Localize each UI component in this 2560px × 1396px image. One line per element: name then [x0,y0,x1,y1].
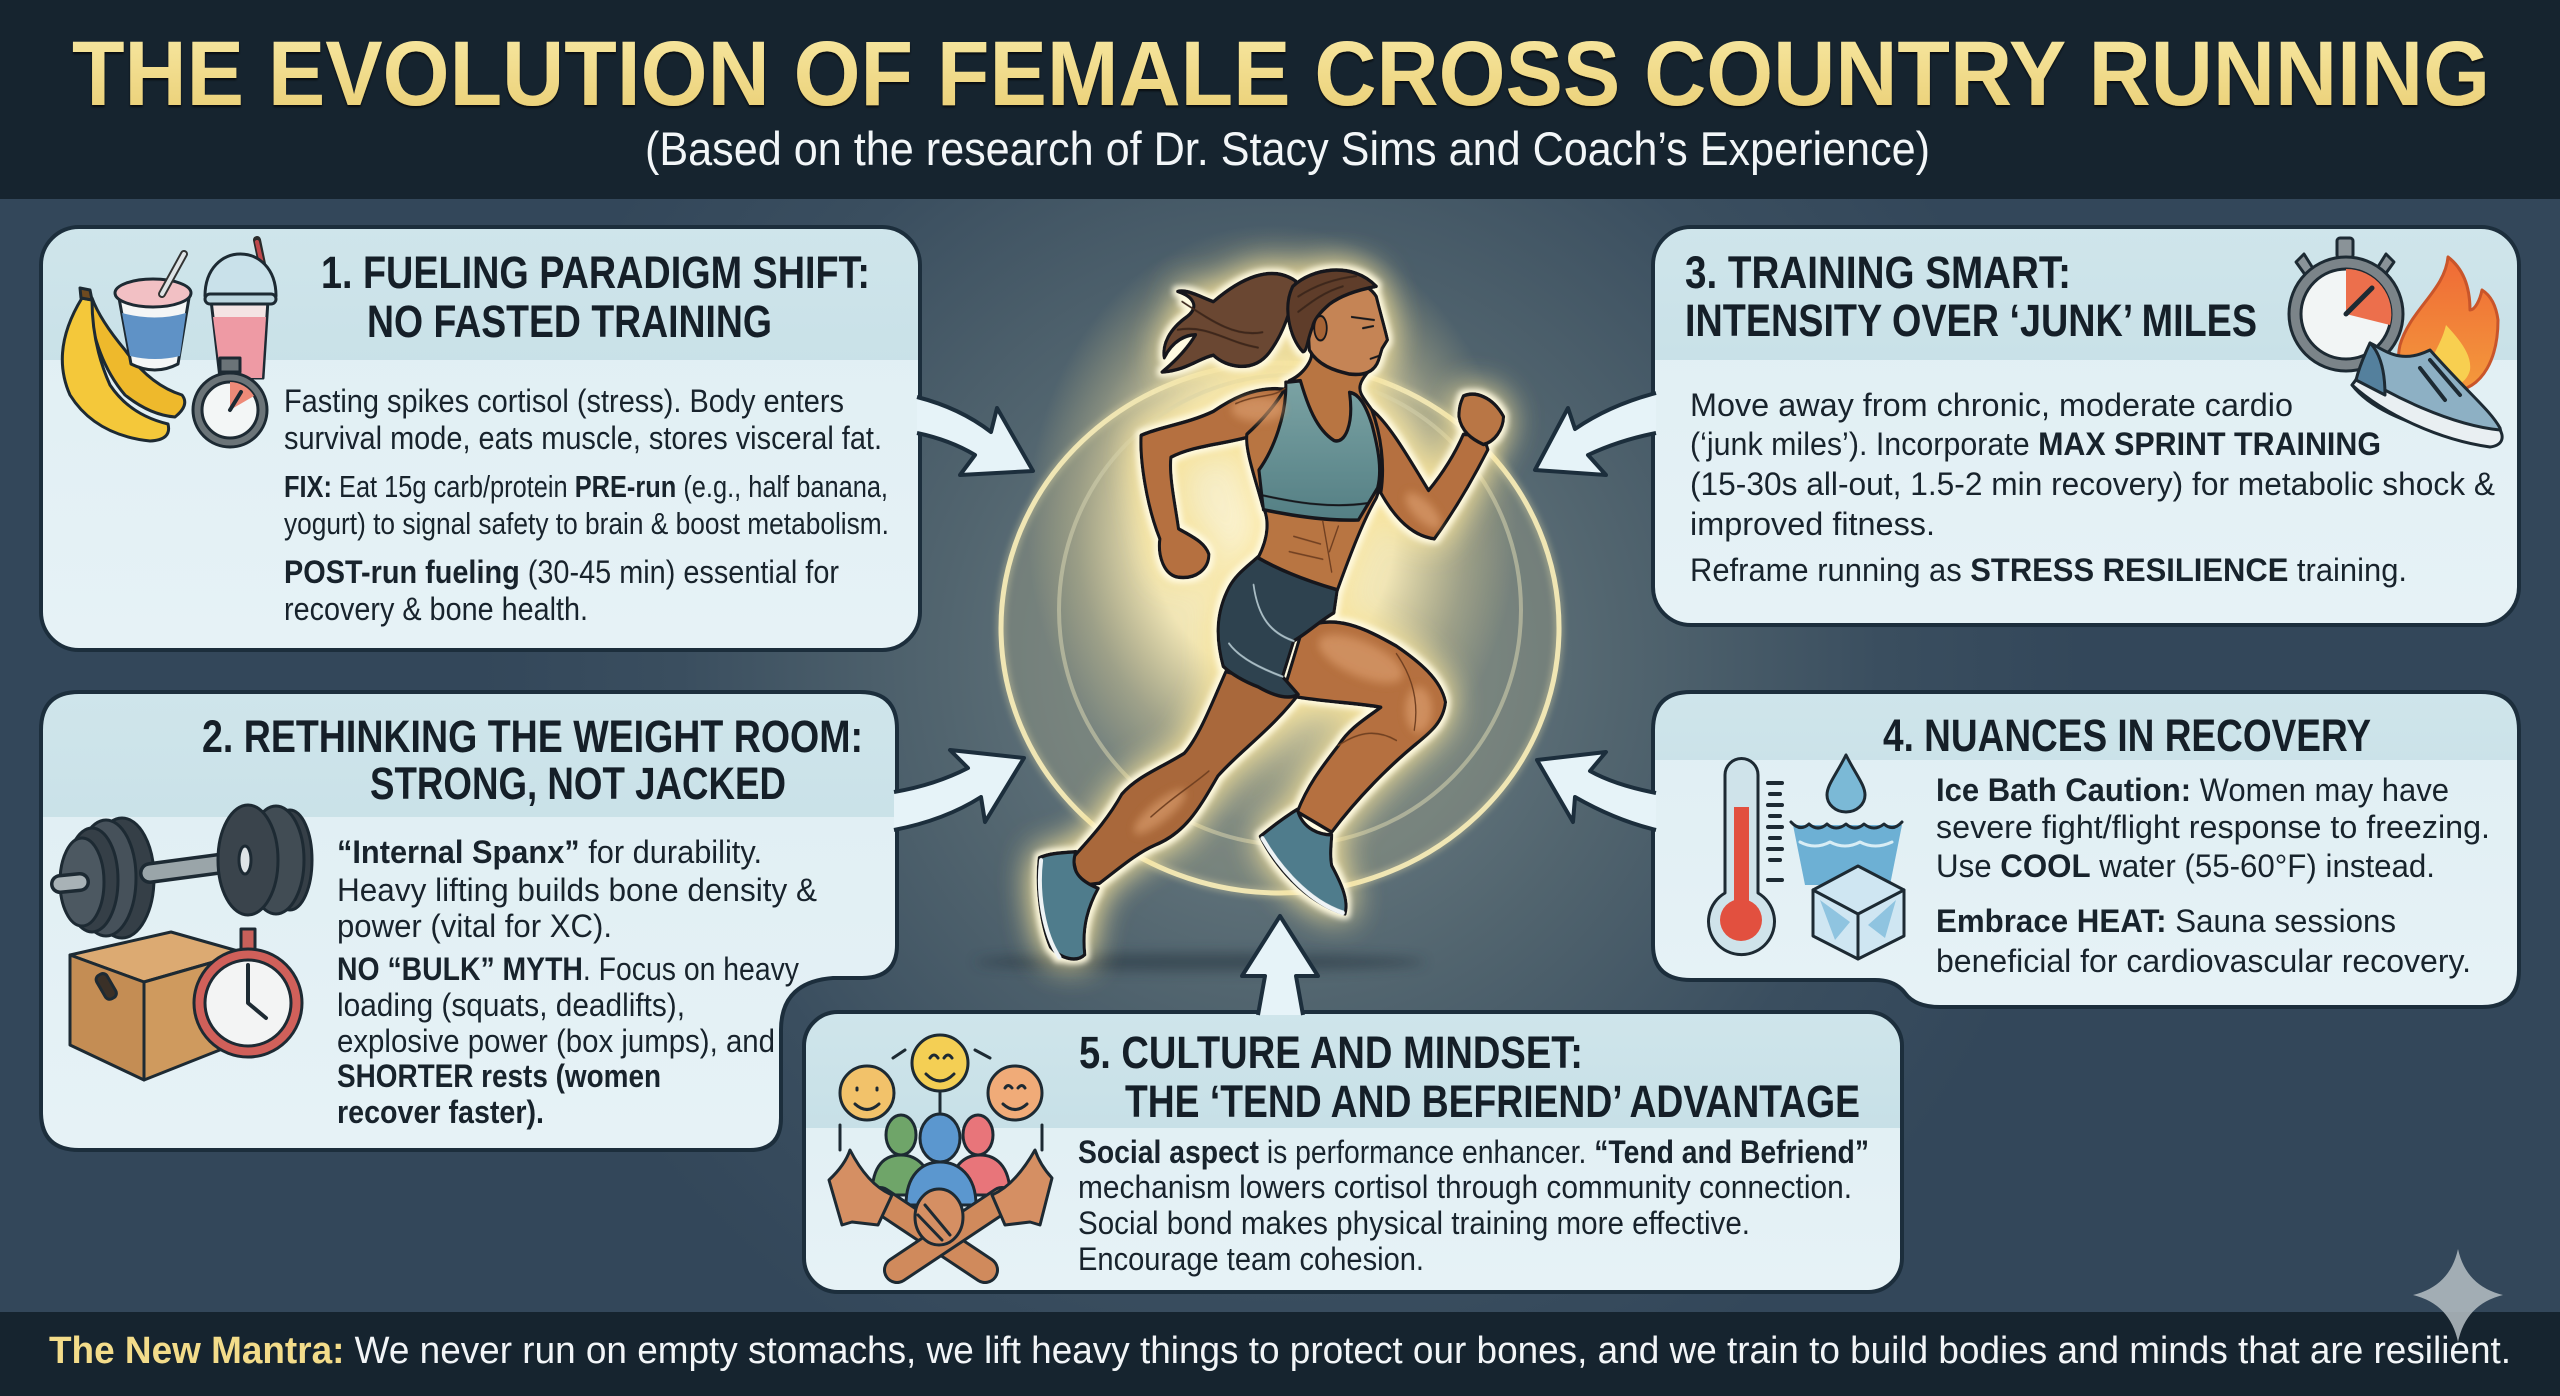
body text: Heavy lifting builds bone density & [337,872,817,908]
body text: yogurt) to signal safety to brain & boost metabolism. [284,506,889,541]
panel 5: culture and mindset [804,1012,1902,1292]
panel 3: training smart [1653,227,2519,625]
body text: loading (squats, deadlifts), [337,987,685,1023]
body text: POST-run fueling (30-45 min) essential for [284,554,839,590]
body text: recovery & bone health. [284,591,588,627]
body text: Social aspect is performance enhancer. “Tend and Befriend” [1078,1134,1869,1170]
body text: Encourage team cohesion. [1078,1241,1424,1277]
body text: severe fight/flight response to freezing. [1936,809,2490,845]
body text: power (vital for XC). [337,908,612,944]
mantra text: The New Mantra: We never run on empty stomachs, we lift heavy things to protect our bones, and we train to build bodies and minds that are resilient. [49,1330,2511,1372]
icon: food and stopwatch [62,240,276,447]
body text: (‘junk miles’). Incorporate MAX SPRINT TRAINING [1690,426,2381,462]
back leg [1073,672,1300,886]
icon: stopwatch, flame and shoe [2289,238,2502,447]
skin highlights [1129,396,1446,841]
sports bra [1259,381,1380,520]
shorts [1218,557,1337,697]
panel 4: recovery [1653,692,2519,1007]
body text [1690,387,2495,588]
heading [321,247,870,347]
icon: team and smiling faces [829,1035,1052,1270]
body text: Embrace HEAT: Sauna sessions [1936,903,2396,939]
heading: 3. TRAINING SMART: [1685,247,2071,298]
arrow from panel 5 [1242,916,1318,1015]
energy rings [1001,363,1559,893]
heading [1685,247,2257,346]
back arm [1141,389,1294,578]
arrow from panel 4 [1537,752,1656,830]
panel 1: fueling [41,227,920,650]
ponytail [1162,273,1296,372]
body text: Move away from chronic, moderate cardio [1690,387,2293,423]
body text: explosive power (box jumps), and [337,1023,775,1059]
heading: 2. RETHINKING THE WEIGHT ROOM: [202,711,863,762]
body text: SHORTER rests (women [337,1058,661,1094]
body text: (15-30s all-out, 1.5-2 min recovery) for metabolic shock & [1690,466,2495,502]
icon: water and ice [1791,755,1904,959]
body text: “Internal Spanx” for durability. [337,834,762,870]
heading: INTENSITY OVER ‘JUNK’ MILES [1685,295,2257,346]
central figure: glowing runner [975,225,1559,971]
shorts trim [1229,585,1294,677]
heading: 1. FUELING PARADIGM SHIFT: [321,247,870,298]
front arm [1372,410,1488,539]
body text: Social bond makes physical training more effective. [1078,1205,1750,1241]
hair [1288,270,1376,352]
heading: 4. NUANCES IN RECOVERY [1883,710,2371,761]
facial details [1178,276,1381,359]
arrow from panel 2 [894,750,1024,830]
front leg [1283,622,1446,832]
body text [1936,772,2490,979]
body text: improved fitness. [1690,506,1935,542]
body text: recover faster). [337,1094,544,1130]
body text: Reframe running as STRESS RESILIENCE training. [1690,552,2407,588]
arrows pointing to the runner [894,393,1656,1015]
body text [1078,1134,1869,1277]
panel 2: weight room [41,692,897,1150]
arrow from panel 3 [1535,393,1656,475]
body text: mechanism lowers cortisol through community connection. [1078,1169,1852,1205]
face and head [1309,280,1387,374]
back shoe [1038,852,1098,959]
icon: dumbbell, plyo box and clock [60,805,312,1080]
heading: NO FASTED TRAINING [367,296,772,347]
body text: Use COOL water (55-60°F) instead. [1936,848,2435,884]
shoe soles [1040,838,1343,957]
body text [337,834,817,1130]
abs and muscle lines [1151,388,1416,817]
arrow from panel 1 [917,397,1033,475]
heading: STRONG, NOT JACKED [370,758,786,809]
header banner [0,0,2560,199]
fist [1459,394,1504,444]
body text: beneficial for cardiovascular recovery. [1936,943,2471,979]
runner silhouette [1038,270,1504,959]
body text: survival mode, eats muscle, stores visceral fat. [284,420,882,456]
icon: sparkle watermark [2413,1249,2503,1342]
subtitle: (Based on the research of Dr. Stacy Sims and Coach’s Experience) [645,122,1930,175]
icon: thermometer [1709,759,1782,955]
body text: Ice Bath Caution: Women may have [1936,772,2449,808]
footer mantra bar [0,1249,2560,1396]
body text: FIX: Eat 15g carb/protein PRE-run (e.g., half banana, [284,469,888,504]
body text: Fasting spikes cortisol (stress). Body enters [284,383,844,419]
heading [202,711,863,809]
front shoe [1260,809,1346,914]
heading [1079,1027,1860,1127]
torso [1247,350,1382,590]
body text [284,383,889,627]
heading: THE ‘TEND AND BEFRIEND’ ADVANTAGE [1125,1076,1860,1127]
body text: NO “BULK” MYTH. Focus on heavy [337,951,799,987]
heading: 5. CULTURE AND MINDSET: [1079,1027,1583,1078]
